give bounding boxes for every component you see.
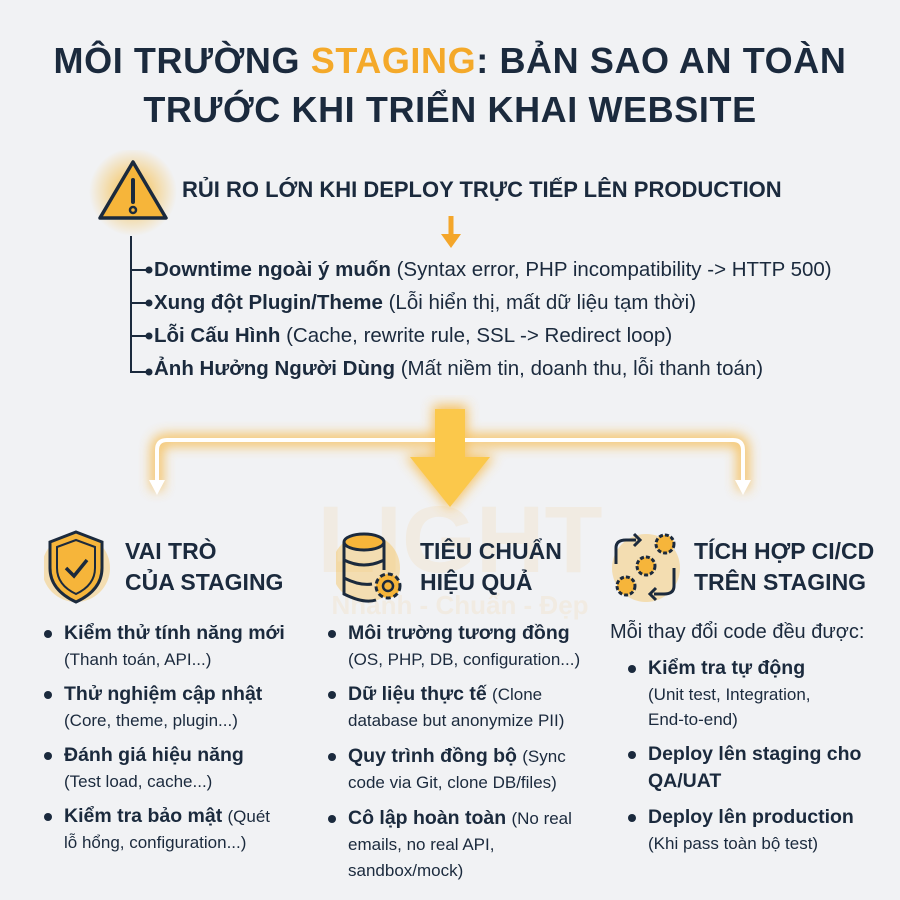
list: Kiểm thử tính năng mới xyxy=(64,622,285,644)
heading: TÍCH HỢP CI/CD xyxy=(694,538,874,564)
arrow: branching to three columns xyxy=(142,396,758,514)
heading: CỦA STAGING xyxy=(125,569,283,595)
heading: TRÊN STAGING xyxy=(694,569,866,595)
list: (Unit test, Integration, xyxy=(648,685,811,704)
list xyxy=(328,622,580,880)
list: Dữ liệu thực tế (Clone database but anonymize PII) xyxy=(348,683,564,730)
list: Deploy lên production xyxy=(648,806,854,828)
risk list: Lỗi Cấu Hình (Cache, rewrite rule, SSL -> Redirect loop) xyxy=(154,324,672,347)
heading: TIÊU CHUẨN xyxy=(420,538,562,564)
column: CI/CD xyxy=(610,533,874,853)
heading xyxy=(694,538,874,595)
risk list: Xung đột Plugin/Theme (Lỗi hiển thị, mất dữ liệu tạm thời) xyxy=(154,291,696,314)
list: Deploy lên staging cho QA/UAT xyxy=(648,743,861,792)
title: TRƯỚC KHI TRIỂN KHAI WEBSITE xyxy=(143,89,757,130)
intro: Mỗi thay đổi code đều được: xyxy=(610,621,864,643)
risk list: Downtime ngoài ý muốn (Syntax error, PHP incompatibility -> HTTP 500) xyxy=(154,258,832,281)
list: (OS, PHP, DB, configuration...) xyxy=(348,650,580,669)
heading: VAI TRÒ xyxy=(125,538,217,564)
risk tree lines xyxy=(130,236,152,376)
risk list: Ảnh Hưởng Người Dùng (Mất niềm tin, doanh thu, lỗi thanh toán) xyxy=(154,357,763,380)
list: Thử nghiệm cập nhật xyxy=(64,683,262,705)
list: (Thanh toán, API...) xyxy=(64,650,211,669)
risk list xyxy=(154,258,832,380)
icon: warning triangle xyxy=(91,150,175,234)
icon: shield xyxy=(44,530,110,604)
icon: gears cycle xyxy=(612,533,680,602)
arrow: small orange xyxy=(441,216,461,248)
icon: database gear xyxy=(336,532,402,603)
title: MÔI TRƯỜNG STAGING: BẢN SAO AN TOÀN xyxy=(54,40,846,81)
heading xyxy=(125,538,283,595)
list xyxy=(44,622,285,852)
list: Kiểm tra tự động xyxy=(648,657,805,679)
list: lỗ hổng, configuration...) xyxy=(64,833,246,852)
list: Cô lập hoàn toàn (No real emails, no real API, sandbox/mock) xyxy=(348,807,572,880)
list: Đánh giá hiệu năng xyxy=(64,744,244,766)
list: (Test load, cache...) xyxy=(64,772,212,791)
heading xyxy=(420,538,562,595)
column: vai trò xyxy=(44,530,285,852)
list: Môi trường tương đồng xyxy=(348,622,570,644)
list: Kiểm tra bảo mật (Quét xyxy=(64,805,270,827)
list: End-to-end) xyxy=(648,710,738,729)
list xyxy=(628,657,861,853)
list: (Khi pass toàn bộ test) xyxy=(648,834,818,853)
list: (Core, theme, plugin...) xyxy=(64,711,238,730)
watermark logo: Nhanh - Chuẩn - Đẹp xyxy=(331,590,589,620)
risk heading: RỦI RO LỚN KHI DEPLOY TRỰC TIẾP LÊN PRODUCTION xyxy=(182,177,782,202)
watermark logo: LIGHT xyxy=(318,487,602,593)
list: Quy trình đồng bộ (Sync code via Git, clone DB/files) xyxy=(348,745,566,792)
title xyxy=(54,40,846,130)
column: tiêu chuẩn xyxy=(328,532,580,880)
heading: HIỆU QUẢ xyxy=(420,569,532,595)
